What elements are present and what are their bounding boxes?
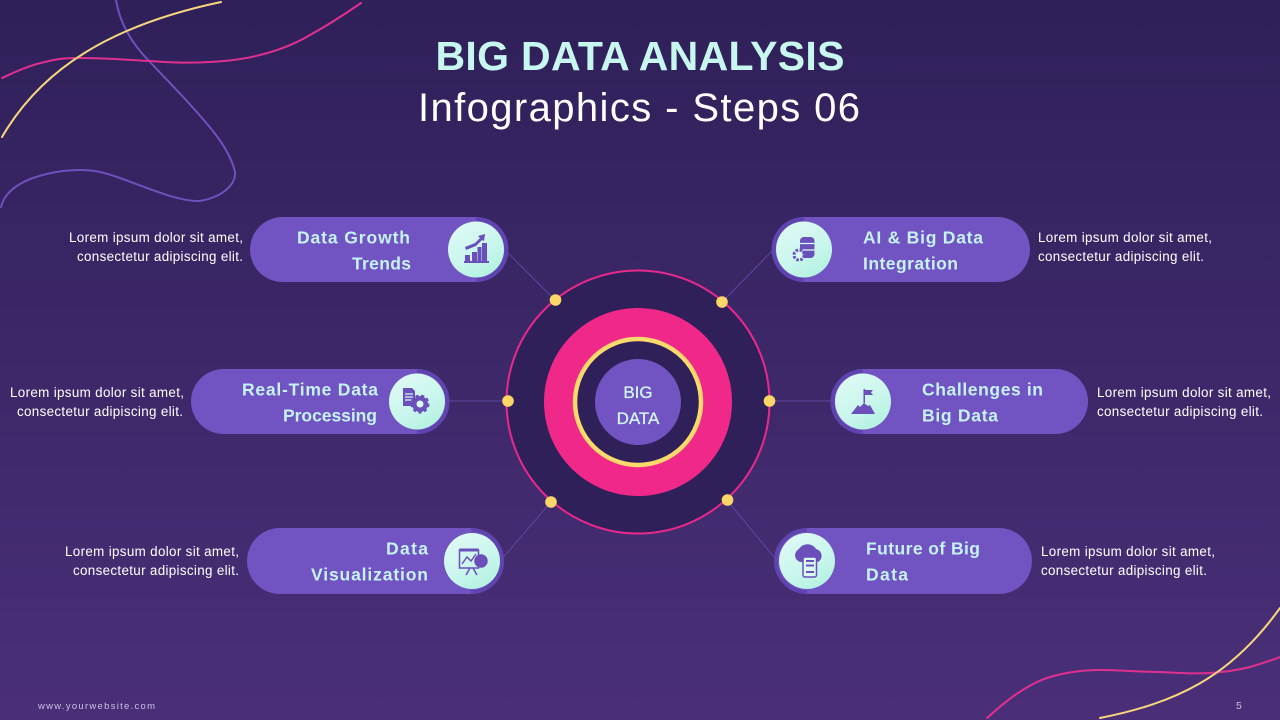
ring dots xyxy=(502,294,775,508)
panel: data visualization xyxy=(247,528,504,594)
pink ring xyxy=(544,308,732,496)
icon: mountain flag xyxy=(851,389,875,414)
panel: real-time data processing xyxy=(191,369,449,434)
text: data growth trends: Lorem ipsum dolor sit amet, xyxy=(69,230,243,245)
panel: future of big data xyxy=(775,528,1032,594)
text: ai and big data integration: Lorem ipsum dolor sit amet, xyxy=(1038,230,1212,245)
icon: cloud server xyxy=(795,544,822,577)
heading: Future of Big xyxy=(866,538,980,558)
decorative curves top left xyxy=(1,0,361,207)
central ring diagram xyxy=(506,270,770,534)
text: challenges in big data: Lorem ipsum dolor sit amet, xyxy=(1097,385,1271,400)
text: data visualization: Lorem ipsum dolor sit amet, xyxy=(65,544,239,559)
yellow ring xyxy=(575,339,701,465)
panel: ai and big data integration xyxy=(772,217,1030,282)
text: data visualization: consectetur adipiscing elit. xyxy=(73,563,239,578)
heading: Challenges in xyxy=(922,380,1043,400)
text: challenges in big data: consectetur adipiscing elit. xyxy=(1097,404,1263,419)
center circle xyxy=(595,359,681,445)
text: ai and big data integration: consectetur adipiscing elit. xyxy=(1038,249,1204,264)
text: real-time data processing: consectetur adipiscing elit. xyxy=(17,404,183,419)
center label: BIG xyxy=(623,383,653,402)
heading: Trends xyxy=(352,254,411,274)
page number: 5 xyxy=(1236,700,1242,712)
panel: challenges in big data xyxy=(831,369,1088,434)
decorative curves bottom right xyxy=(987,608,1280,718)
panel: data growth trends xyxy=(250,217,508,282)
text: data growth trends: consectetur adipiscing elit. xyxy=(77,249,243,264)
heading: Real-Time Data xyxy=(242,380,378,400)
title xyxy=(418,33,860,130)
title line 2: Infographics - Steps 06 xyxy=(418,86,860,130)
heading: Visualization xyxy=(311,564,428,584)
heading: AI & Big Data xyxy=(863,228,983,248)
title line 1: BIG DATA ANALYSIS xyxy=(436,33,844,79)
icon: presentation chart xyxy=(460,550,487,575)
footer website: www.yourwebsite.com xyxy=(37,701,155,712)
heading: Data xyxy=(386,538,428,558)
heading: Processing xyxy=(283,406,377,426)
heading: Big Data xyxy=(922,406,998,426)
icon: bar chart growth xyxy=(464,234,489,263)
heading: Data xyxy=(866,564,908,584)
text: real-time data processing: Lorem ipsum dolor sit amet, xyxy=(10,385,184,400)
icon: document and gear xyxy=(403,388,428,412)
heading: Data Growth xyxy=(297,228,410,248)
text: future of big data: consectetur adipiscing elit. xyxy=(1041,563,1207,578)
outer ring xyxy=(506,270,770,534)
heading: Integration xyxy=(863,254,958,274)
text: future of big data: Lorem ipsum dolor sit amet, xyxy=(1041,544,1215,559)
center label: DATA xyxy=(617,409,660,428)
icon: database and gear xyxy=(794,237,814,260)
connector lines xyxy=(445,248,834,562)
